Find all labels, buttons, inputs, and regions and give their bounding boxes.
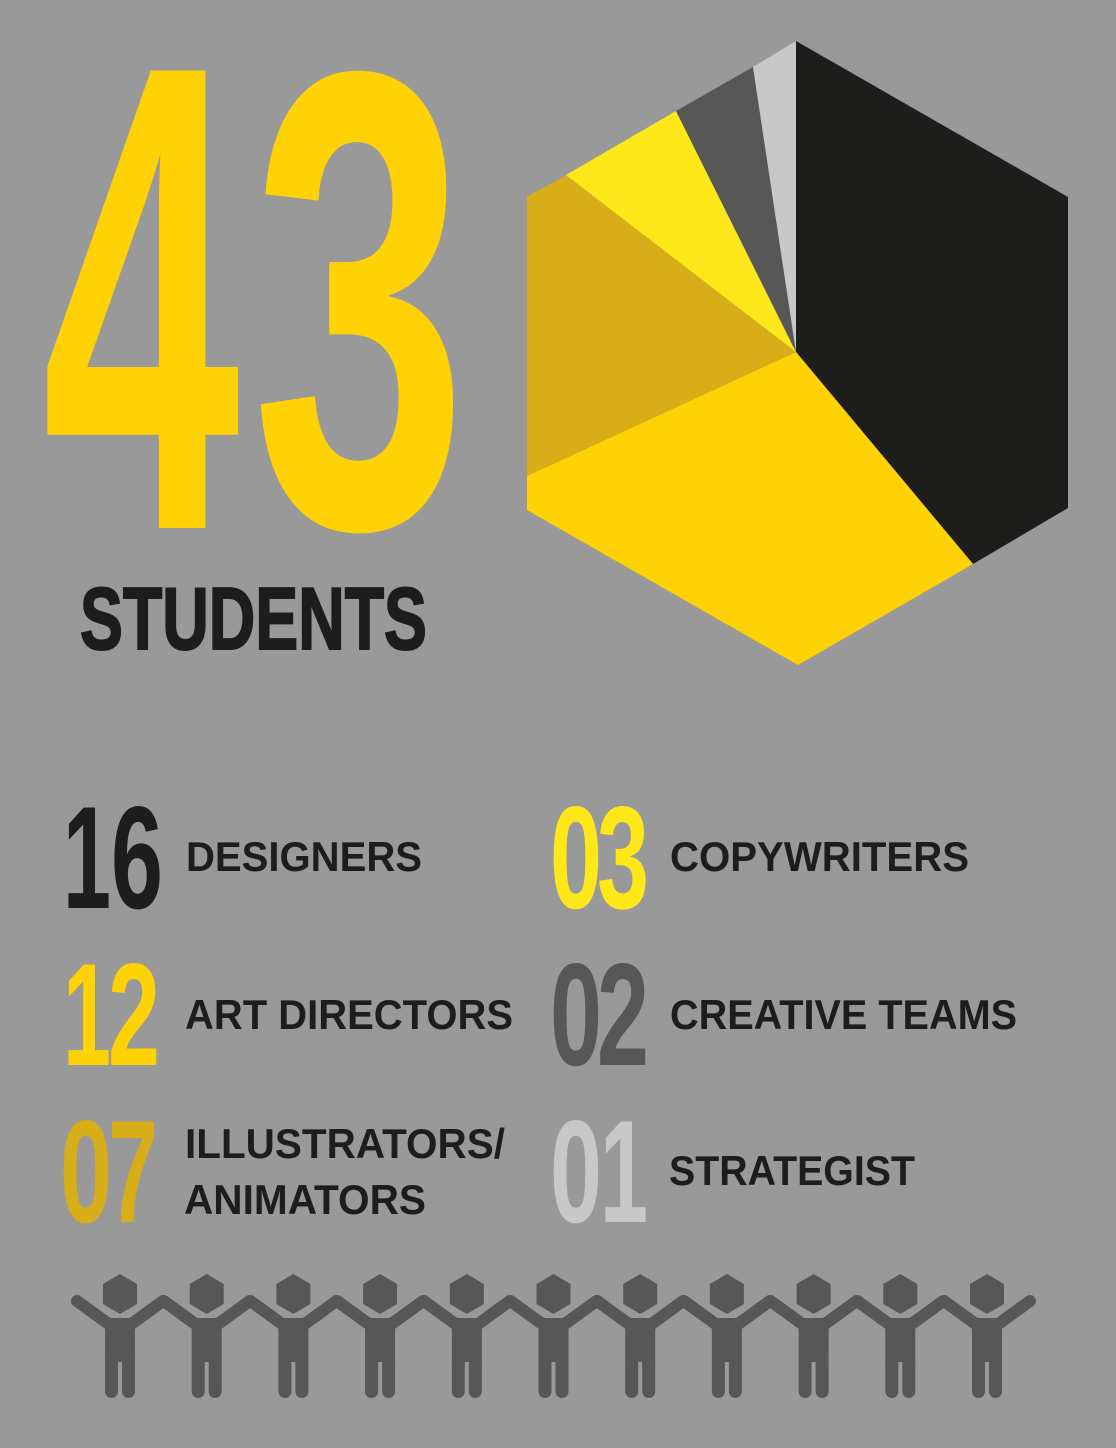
stat: 12 art directors: ART DIRECTORS: [185, 991, 513, 1038]
row of people holding hands: [77, 1274, 1030, 1398]
stat: 03 copywriters: 0: [550, 776, 602, 939]
stat: 16 designers: 1: [63, 776, 111, 939]
stat: 03 copywriters: 3: [597, 776, 649, 939]
hexagonal pie chart: [527, 41, 1068, 665]
stat: 12 art directors: 1: [63, 933, 111, 1096]
stat: 07 illustrators / animators: ANIMATORS: [184, 1176, 426, 1223]
stat: 16 designers: 6: [111, 776, 163, 939]
stat: 03 copywriters: [550, 776, 969, 939]
stat: 07 illustrators / animators: ILLUSTRATORS/: [185, 1120, 505, 1167]
stat: 16 designers: DESIGNERS: [186, 833, 422, 880]
stat: 01 strategist: [550, 1090, 915, 1253]
stat: 16 designers: [63, 776, 422, 939]
stat: 07 illustrators / animators: [60, 1090, 505, 1253]
stat: 01 strategist: 1: [600, 1090, 648, 1253]
stat: 12 art directors: 2: [108, 933, 160, 1096]
stat: 02 creative teams: 2: [597, 933, 649, 1096]
stat: 02 creative teams: CREATIVE TEAMS: [670, 991, 1017, 1038]
stat: 03 copywriters: COPYWRITERS: [670, 833, 969, 880]
stat: 07 illustrators / animators: 7: [108, 1090, 158, 1253]
stat: 01 strategist: STRATEGIST: [669, 1147, 915, 1194]
stat: 02 creative teams: [550, 933, 1017, 1096]
stat: 12 art directors: [63, 933, 513, 1096]
stat: 07 illustrators / animators: 0: [60, 1090, 112, 1253]
stat: 02 creative teams: 0: [550, 933, 602, 1096]
stat: 01 strategist: 0: [550, 1090, 602, 1253]
heading: students: STUDENTS: [80, 569, 427, 668]
